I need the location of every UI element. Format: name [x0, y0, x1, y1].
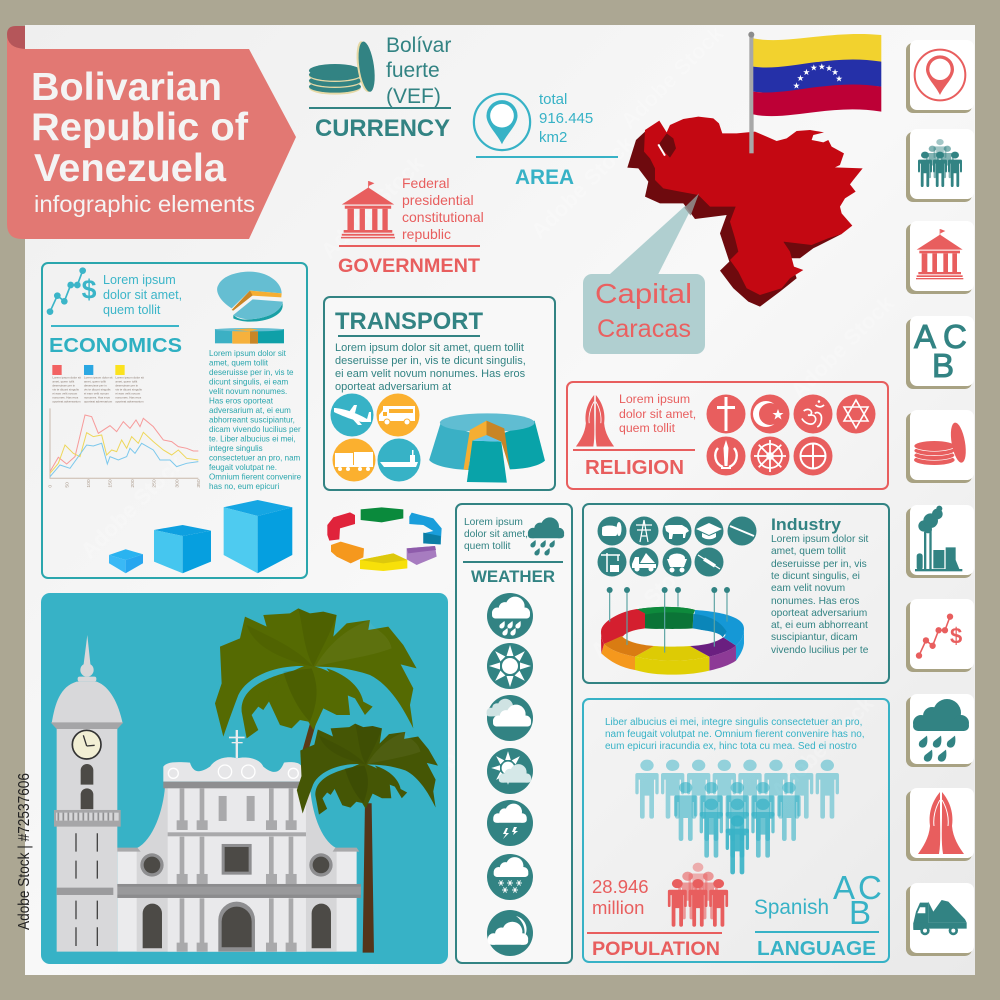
- economics heading: ECONOMICS: [49, 335, 182, 357]
- stock watermarks: Adobe Stock: [76, 450, 189, 564]
- economics intro text: Lorem ipsum: [103, 273, 176, 287]
- line chart with legend: vis te dicunt singulis: [52, 388, 79, 392]
- economics body text: velit novum nonumes.: [209, 387, 287, 396]
- line chart with legend: nonumes. Has eros: [84, 396, 110, 400]
- government type: republic: [402, 226, 451, 242]
- icon: dharma wheel: [750, 436, 790, 476]
- tile: economy growth: $: [950, 623, 962, 648]
- economics body text: dicunt singulis, ei eam: [209, 378, 288, 386]
- weather text: quem tollit: [464, 541, 511, 552]
- coloured ring segments: [327, 507, 442, 571]
- icon: sun cross: [794, 436, 832, 476]
- line chart with legend: oporteat adversarium: [115, 400, 144, 404]
- flag of Venezuela on pole: ★: [793, 81, 801, 91]
- flag of Venezuela on pole: [748, 32, 881, 153]
- icon: bus: [376, 394, 420, 436]
- pie chart: [215, 272, 284, 344]
- icon: area pin: [474, 94, 530, 150]
- icon: A B C letters: A: [833, 869, 855, 906]
- industry text: eam velit novum: [771, 583, 845, 594]
- panel: transport: [324, 297, 555, 490]
- cathedral: [113, 730, 361, 952]
- icon: coins: [598, 516, 626, 546]
- transport text: deseruisse per in, vis te dicunt singulis,: [335, 355, 526, 367]
- icon: syringe: [694, 548, 724, 576]
- government type: Federal: [402, 175, 449, 191]
- economics body text: feugait volutpat ne.: [209, 463, 277, 472]
- stock watermarks: Adobe Stock: [316, 150, 429, 264]
- line chart with legend: [48, 365, 202, 488]
- flag of Venezuela on pole: ★: [825, 63, 833, 73]
- icon: cow: [662, 516, 692, 546]
- line chart with legend: 250: [152, 479, 158, 488]
- economics body text: amet, quem tollit: [209, 358, 269, 368]
- icon: growth and dollar: $: [82, 274, 97, 304]
- religion text: Lorem ipsum: [619, 392, 690, 406]
- language name: Spanish: [754, 896, 829, 919]
- people pyramid: [635, 760, 839, 874]
- area heading: AREA: [515, 166, 574, 189]
- industry text: amet, quem tollit: [771, 546, 846, 557]
- area value: total: [539, 91, 567, 108]
- icon: pipeline: [728, 516, 756, 546]
- stock watermarks: Adobe Stock: [786, 290, 899, 404]
- line chart with legend: 300: [174, 479, 180, 488]
- line chart with legend: vis te dicunt singulis: [84, 388, 111, 392]
- icon: praying hands: [576, 395, 614, 446]
- icon: cross: [706, 394, 746, 434]
- line chart with legend: deseruisse per in: [52, 384, 75, 388]
- icon: moon and cloud: [487, 910, 533, 956]
- economics body text: consectetuer an pro, nam: [209, 454, 301, 462]
- title ribbon: infographic elements: [34, 191, 255, 217]
- line chart with legend: 200: [130, 479, 136, 488]
- economics intro text: dolor sit amet,: [103, 288, 182, 302]
- icon: A B C letters: C: [858, 869, 882, 906]
- flag of Venezuela on pole: ★: [835, 73, 843, 83]
- panel: religion: [567, 382, 888, 489]
- tile: language letters: [906, 316, 974, 389]
- population text: Liber albucius ei mei, integre singulis consectetuer an pro,: [605, 717, 862, 728]
- government heading: GOVERNMENT: [338, 255, 480, 277]
- line chart with legend: ei eam velit novum: [84, 392, 109, 396]
- capital callout: Capital: [595, 278, 692, 309]
- line chart with legend: Lorem ipsum dolor sit: [84, 376, 113, 380]
- economics body text: Omnium fierent convenire: [209, 472, 302, 482]
- stock watermarks: Adobe Stock: [766, 690, 879, 804]
- 3D cubes: [109, 500, 292, 573]
- tile: praying hands: [906, 788, 974, 861]
- tile: economy growth: [906, 599, 974, 672]
- icon: mine cart: [662, 548, 692, 576]
- line chart with legend: 0: [48, 485, 54, 488]
- palm trees: [215, 608, 438, 953]
- line chart with legend: 150: [108, 479, 114, 488]
- economics body text: te. Liber albucius ei mei,: [209, 434, 296, 444]
- panel: cathedral illustration: [41, 593, 448, 964]
- economics body text: dicam vivendo lucilius per: [209, 425, 301, 434]
- tile: government building: [906, 221, 974, 294]
- religion heading: RELIGION: [585, 457, 684, 479]
- tile: people: [906, 129, 974, 202]
- population text: eum epicuri iracundia ex, hinc tota cu mea. Sed ei nostro: [605, 741, 857, 752]
- tile: location pin: [906, 40, 974, 113]
- icon: red people group: [668, 863, 728, 927]
- tile: language letters: C: [943, 318, 967, 355]
- transport text: Lorem ipsum dolor sit amet, quem tollit: [335, 342, 524, 354]
- icon: dump truck: [630, 548, 658, 576]
- ring chart with pins: [601, 587, 744, 675]
- tile: coins: [906, 410, 974, 483]
- industry text: oporteat adversarium: [771, 608, 867, 619]
- industry text: at, ei eum abhorreant: [771, 620, 868, 631]
- icon: power pylon: [630, 516, 658, 546]
- icon: government building: [341, 181, 395, 238]
- line chart with legend: nonumes. Has eros: [115, 396, 142, 400]
- currency name: Bolívar: [386, 34, 451, 57]
- map of Venezuela: [627, 117, 863, 307]
- population figure: 28.946: [592, 876, 649, 897]
- government: [338, 175, 484, 277]
- line chart with legend: ei eam velit novum: [52, 392, 78, 396]
- icon: crescent and star: [750, 394, 790, 434]
- economics body text: abhorreant suscipiantur,: [209, 416, 295, 424]
- line chart with legend: 50: [64, 482, 70, 488]
- image id caption: Adobe Stock | #72537606: [16, 773, 33, 930]
- 3D pie segment: [429, 413, 545, 483]
- weather text: dolor sit amet,: [464, 529, 528, 540]
- economics body text: has no, eum epicuri: [209, 482, 279, 491]
- area value: km2: [539, 129, 567, 146]
- panel: weather: [456, 504, 572, 963]
- tile: language letters: B: [932, 347, 954, 384]
- government type: presidential: [402, 192, 474, 208]
- religion text: dolor sit amet,: [619, 407, 696, 421]
- line chart with legend: deseruisse per in: [115, 384, 138, 388]
- flag of Venezuela on pole: ★: [797, 73, 805, 83]
- area value: 916.445: [539, 110, 593, 127]
- panel: economics: [42, 263, 307, 578]
- icon: khanda: [706, 436, 746, 476]
- line chart with legend: vis te dicunt singulis: [115, 388, 142, 392]
- icon: coins: [309, 40, 377, 95]
- title ribbon: Bolivarian: [31, 66, 222, 109]
- line chart with legend: oporteat adversarium: [52, 400, 81, 404]
- icon: A B C letters: B: [849, 894, 871, 931]
- icon: star of David: [836, 394, 876, 434]
- panel: industry: [583, 504, 889, 683]
- icon: snow: [487, 854, 533, 900]
- transport text: ei eam velit novum nonumes. Has eros: [335, 368, 526, 380]
- icon: graduation cap: [694, 516, 724, 546]
- language heading: LANGUAGE: [757, 938, 876, 960]
- tile: dump truck: [906, 883, 974, 956]
- economics body text: adversarium at, ei eum: [209, 406, 291, 415]
- transport text: oporteat adversarium at: [335, 381, 451, 393]
- industry text: te dicunt singulis, ei: [771, 571, 860, 582]
- title ribbon: [7, 26, 296, 239]
- industry text: suscipiantur, dicam: [771, 632, 858, 643]
- line chart with legend: nonumes. Has eros: [52, 396, 79, 400]
- weather text: Lorem ipsum: [464, 517, 523, 528]
- stock watermarks: Adobe Stock: [586, 550, 699, 664]
- flag of Venezuela on pole: ★: [818, 62, 826, 72]
- industry text: deseruisse per in, vis: [771, 559, 867, 570]
- icon column: [906, 40, 974, 956]
- stock watermarks: Adobe Stock: [616, 20, 729, 134]
- flag of Venezuela on pole: ★: [831, 67, 839, 77]
- title ribbon: Venezuela: [34, 147, 226, 190]
- industry heading: Industry: [771, 516, 842, 534]
- flag of Venezuela on pole: ★: [810, 63, 818, 73]
- flag of Venezuela on pole: ★: [803, 67, 811, 77]
- economics body text: integre singulis: [209, 444, 263, 453]
- government type: constitutional: [402, 209, 484, 225]
- icon: cloudy: [487, 695, 533, 741]
- currency name: fuerte: [386, 59, 440, 82]
- economics body text: Has eros oporteat: [209, 396, 274, 406]
- line chart with legend: 350: [196, 479, 202, 488]
- industry text: Lorem ipsum dolor sit: [771, 534, 869, 545]
- economics body text: Lorem ipsum dolor sit: [209, 349, 287, 358]
- area: [474, 91, 618, 189]
- panel: population and language: [583, 699, 889, 962]
- population figure: million: [592, 897, 644, 918]
- industry text: vivendo lucilius per te: [771, 645, 869, 656]
- icon: sun and cloud: [484, 744, 533, 794]
- icon: thunderstorm: [487, 800, 533, 846]
- religion text: quem tollit: [619, 421, 676, 435]
- icon: train: [332, 438, 376, 482]
- line chart with legend: amet, quem tollit: [84, 380, 106, 384]
- icon: plane: [330, 394, 374, 436]
- icon: ship: [378, 438, 420, 482]
- line chart with legend: ei eam velit novum: [115, 392, 141, 396]
- tile: language letters: A: [914, 318, 936, 355]
- currency: [309, 34, 451, 142]
- icon: om: [794, 394, 832, 434]
- line chart with legend: 100: [86, 479, 92, 488]
- economics body text: deseruisse per in, vis te: [209, 368, 294, 377]
- line chart with legend: Lorem ipsum dolor sit: [115, 376, 144, 380]
- clock tower: [51, 635, 123, 952]
- tile: rain cloud: [906, 694, 974, 767]
- line chart with legend: deseruisse per in: [84, 384, 107, 388]
- icon: rain cloud small: [528, 517, 564, 556]
- population heading: POPULATION: [592, 938, 720, 960]
- industry text: nonumes. Has eros: [771, 596, 859, 607]
- icon: sun: [480, 636, 540, 696]
- weather heading: WEATHER: [471, 568, 555, 586]
- stock watermarks: Adobe Stock: [406, 690, 519, 804]
- line chart with legend: amet, quem tollit: [115, 380, 137, 384]
- currency name: (VEF): [386, 85, 441, 108]
- population text: nam feugait volutpat ne. Omnium fierent convenire has no,: [605, 729, 865, 740]
- icon: growth and dollar: [47, 267, 97, 315]
- line chart with legend: amet, quem tollit: [52, 380, 74, 384]
- icon: crane: [598, 548, 626, 576]
- icon: rain: [487, 593, 533, 639]
- line chart with legend: Lorem ipsum dolor sit: [52, 376, 81, 380]
- stock watermarks: [76, 20, 899, 804]
- currency heading: CURRENCY: [315, 115, 450, 142]
- economics intro text: quem tollit: [103, 303, 161, 317]
- line chart with legend: oporteat adversarium: [84, 400, 113, 404]
- capital callout: Caracas: [597, 315, 691, 343]
- transport heading: TRANSPORT: [335, 308, 483, 335]
- stock watermarks: Adobe Stock: [526, 130, 639, 244]
- capital callout: [583, 193, 705, 354]
- tile: factory: [906, 505, 974, 578]
- title ribbon: Republic of: [31, 106, 249, 149]
